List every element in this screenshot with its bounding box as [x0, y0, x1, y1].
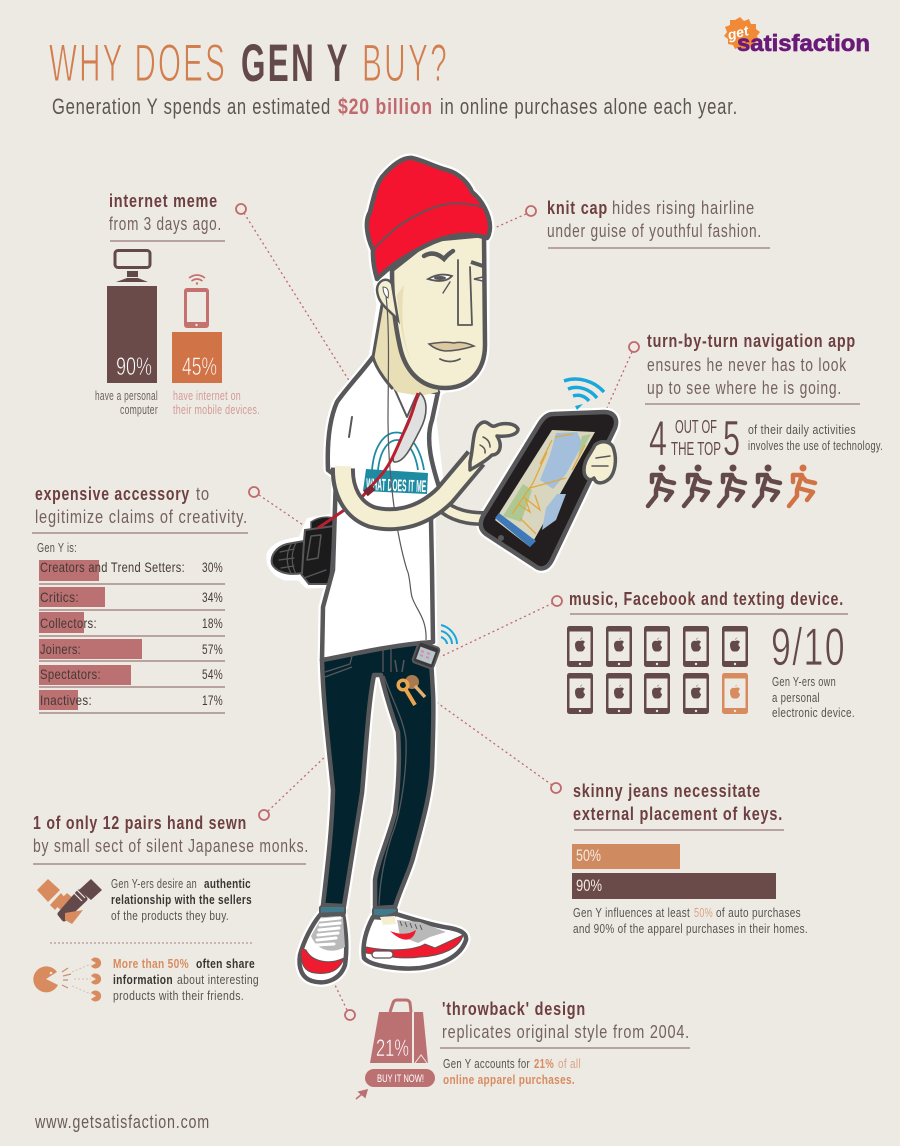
heading: expensive accessory [32, 484, 248, 533]
panel: knit cap [547, 198, 770, 248]
bar: 45% mobile: 45% [182, 353, 217, 381]
chart: Gen Y is: 54% [202, 666, 223, 682]
caption: mobile [173, 389, 260, 417]
stat: 4 out of the top 5: 4 [649, 412, 667, 466]
title: GEN Y [241, 34, 350, 93]
heading: hand sewn: 1 of only 12 pairs hand sewn [33, 813, 247, 833]
text: share information: information [113, 973, 173, 987]
text: apparel purchases [443, 1057, 581, 1087]
icon grid: ten tablets [567, 626, 748, 714]
text: apparel purchases: Gen Y accounts for [443, 1057, 530, 1071]
subtitle: $20 billion [338, 94, 433, 119]
text: influence: of auto purchases [716, 906, 801, 920]
illustration: hipster figure [271, 158, 616, 982]
bar chart: purchases [572, 844, 776, 899]
text: apparel purchases: of all [558, 1057, 581, 1071]
icon: computer [115, 250, 150, 282]
chart: Gen Y is: Collectors: [40, 615, 97, 631]
neck and head [373, 235, 485, 396]
bar: 45% mobile [172, 332, 222, 383]
near arm and pointing hand [343, 422, 518, 519]
heading: internet meme: internet meme [109, 191, 218, 211]
title: BUY? [362, 34, 449, 93]
ear and earbud [377, 280, 398, 320]
text: share information: often share [196, 957, 255, 971]
text: authentic relationship: of the products they buy. [111, 909, 229, 923]
face features [424, 251, 483, 362]
icon: pac-man sharing [33, 958, 101, 1002]
logo: get satisfaction [724, 17, 870, 56]
icon: smartphone with wifi [184, 275, 209, 328]
panel: hand sewn [33, 813, 309, 1003]
text: share information [113, 957, 259, 1003]
heading: skinny jeans [573, 781, 784, 830]
heading: internet meme [109, 191, 225, 241]
stat: 9/10: a personal [772, 691, 820, 705]
far hand on tablet [584, 442, 615, 483]
icon: handshake [37, 879, 102, 924]
panel: knit cap: knit cap [547, 198, 608, 218]
button: buy it now: BUY IT NOW! [377, 1073, 424, 1085]
heading: hand sewn [33, 813, 309, 864]
heading: expensive accessory: to [196, 484, 210, 504]
jeans [322, 642, 433, 908]
chart: Gen Y is: 34% [202, 589, 223, 605]
text: authentic relationship: Gen Y-ers desire an [111, 877, 197, 891]
earphone wire [386, 296, 426, 640]
panel: internet meme [95, 191, 260, 417]
caption: mobile: have internet on [173, 389, 241, 403]
stat: 9/10 [771, 618, 855, 720]
icon row: runners [648, 464, 815, 506]
caption: computer: computer [120, 403, 158, 417]
heading: throwback [440, 999, 690, 1048]
text: influence: and 90% of the apparel purchases in their homes. [573, 922, 808, 936]
stat: 4 out of the top 5: THE TOP [671, 439, 721, 459]
heading: skinny jeans: skinny jeans necessitate [573, 781, 761, 801]
heading: navigation app: ensures he never has to look [647, 355, 847, 375]
chart: Gen Y is: 57% [202, 641, 223, 657]
panel: knit cap: under guise of youthful fashion. [547, 221, 762, 241]
grey neck pad and camera strap [318, 393, 426, 528]
heading: throwback: 'throwback' design [442, 999, 586, 1019]
logo: get satisfaction: get [725, 22, 751, 43]
panel: skinny jeans [572, 781, 808, 936]
chart: Gen Y is: 30% [202, 559, 223, 575]
chart: Gen Y is: Critics: [40, 589, 79, 605]
callout leader lines [236, 204, 639, 1020]
subtitle [52, 94, 738, 119]
text: share information: about interesting [177, 973, 259, 987]
bar: 90% computer [107, 286, 157, 383]
left shoe [300, 906, 346, 982]
illustration: hipster figure: WHAT DOES IT ME [366, 475, 426, 496]
caption: computer: have a personal [95, 389, 158, 403]
chart: Gen Y is: 17% [202, 692, 223, 708]
stat: 9/10: 9/10 [771, 618, 846, 677]
icon: wifi above tablet [564, 379, 604, 410]
chart: Gen Y is: Creators and Trend Setters: [40, 559, 185, 575]
tablet with map [481, 412, 616, 568]
text: authentic relationship [111, 877, 252, 923]
map screen [495, 430, 595, 547]
icon: shopping bag 21% [370, 1000, 428, 1063]
bar chart: purchases: 90% [576, 876, 602, 895]
stat: 9/10: Gen Y-ers own [772, 675, 836, 689]
text: influence: 50% [694, 906, 713, 920]
subtitle: in online purchases alone each year. [440, 94, 738, 119]
icon: shopping bag 21%: 21% [376, 1035, 409, 1062]
text: apparel purchases: 21% [534, 1057, 554, 1071]
stat: 4 out of the top 5 [649, 412, 883, 466]
shirt print: what does it mean [363, 432, 428, 496]
right shoe [363, 908, 466, 969]
camera [272, 517, 336, 584]
chart: Gen Y is: Joiners: [40, 641, 81, 657]
text: share information: products with their friends. [113, 989, 244, 1003]
heading: throwback: replicates original style from 2004. [442, 1022, 690, 1042]
shirt [322, 357, 440, 660]
chart: Gen Y is: Spectators: [40, 666, 101, 682]
footer url: www.getsatisfaction.com [34, 1112, 210, 1132]
ipod [412, 641, 440, 669]
panel: knit cap: hides rising hairline [612, 198, 755, 218]
icon: wifi at ipod [441, 625, 457, 644]
panel: throwback design [356, 999, 690, 1099]
title: WHY DOES [49, 34, 227, 93]
text: authentic relationship: authentic [204, 877, 251, 891]
stat: 4 out of the top 5: 5 [723, 412, 740, 466]
button: buy it now [365, 1069, 435, 1087]
bar: 90% computer: 90% [116, 353, 152, 381]
white halo silhouette [271, 158, 616, 982]
text: apparel purchases: online apparel purchases. [443, 1073, 575, 1087]
chart: Gen Y is [37, 541, 225, 713]
heading: navigation app [645, 331, 860, 404]
icon: cursor arrow [356, 1090, 367, 1099]
text: share information: More than 50% [113, 957, 189, 971]
heading: hand sewn: by small sect of silent Japanese monks. [33, 836, 309, 856]
heading: skinny jeans: external placement of keys. [573, 804, 783, 824]
chart: Gen Y is: 18% [202, 615, 223, 631]
heading: navigation app: up to see where he is going. [647, 378, 842, 398]
panel: expensive accessory [32, 484, 248, 713]
subtitle: Generation Y spends an estimated [52, 94, 331, 119]
logo: get satisfaction: satisfaction [737, 30, 870, 56]
heading: expensive accessory: legitimize claims of creativity. [35, 507, 248, 527]
caption: mobile: their mobile devices. [173, 403, 260, 417]
bar chart: purchases: 50% [576, 846, 601, 865]
panel: navigation app [645, 331, 883, 506]
back forearm [440, 503, 490, 518]
heading: expensive accessory: expensive accessory [35, 484, 190, 504]
stat: 4 out of the top 5: of their daily activities [748, 423, 856, 437]
heading: internet meme: from 3 days ago. [109, 214, 222, 234]
caption: computer [95, 389, 158, 417]
text: influence: Gen Y influences at least [573, 906, 690, 920]
text: influence [573, 906, 808, 936]
knit cap [367, 158, 490, 279]
stat: 4 out of the top 5: OUT OF [675, 417, 717, 437]
text: authentic relationship: relationship with the sellers [111, 893, 252, 907]
panel: personal electronic device [567, 589, 855, 720]
keys [395, 660, 425, 705]
stat: 9/10: electronic device. [772, 706, 855, 720]
chart: Gen Y is: Gen Y is: [37, 541, 77, 555]
chart: Gen Y is: Inactives: [40, 692, 92, 708]
